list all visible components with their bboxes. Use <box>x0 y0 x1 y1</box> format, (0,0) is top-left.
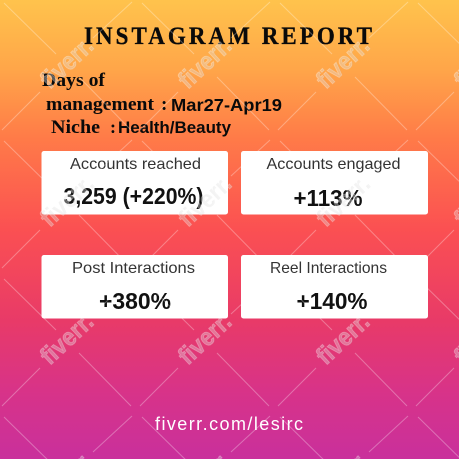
panel: reel interactions <box>241 255 428 318</box>
report details text block: management <box>46 94 155 115</box>
report details text block: Niche <box>51 117 100 138</box>
report details text block: Days of <box>42 70 106 91</box>
footer link: fiverr.com/lesirc <box>155 414 303 434</box>
report details text block <box>42 70 282 138</box>
panel: reel interactions: Reel Interactions <box>270 260 387 277</box>
panel: accounts reached: Accounts reached <box>70 156 201 173</box>
panel: accounts engaged <box>241 151 428 214</box>
panel: reel interactions: +140% <box>296 288 368 314</box>
report details text block: Mar27-Apr19 <box>171 95 282 115</box>
report details text block: : <box>161 94 167 115</box>
panel: accounts reached: 3,259 (+220%) <box>64 183 204 209</box>
title: INSTAGRAM REPORT <box>84 22 372 50</box>
panel: post interactions: Post Interactions <box>72 260 195 277</box>
panel: post interactions <box>42 255 228 318</box>
panel: post interactions: +380% <box>99 288 171 314</box>
panel: accounts engaged: +113% <box>294 185 362 211</box>
report details text block: Health/Beauty <box>118 118 232 137</box>
report details text block: : <box>110 117 116 137</box>
panel: accounts engaged: Accounts engaged <box>266 156 400 173</box>
panel: accounts reached <box>42 151 228 214</box>
